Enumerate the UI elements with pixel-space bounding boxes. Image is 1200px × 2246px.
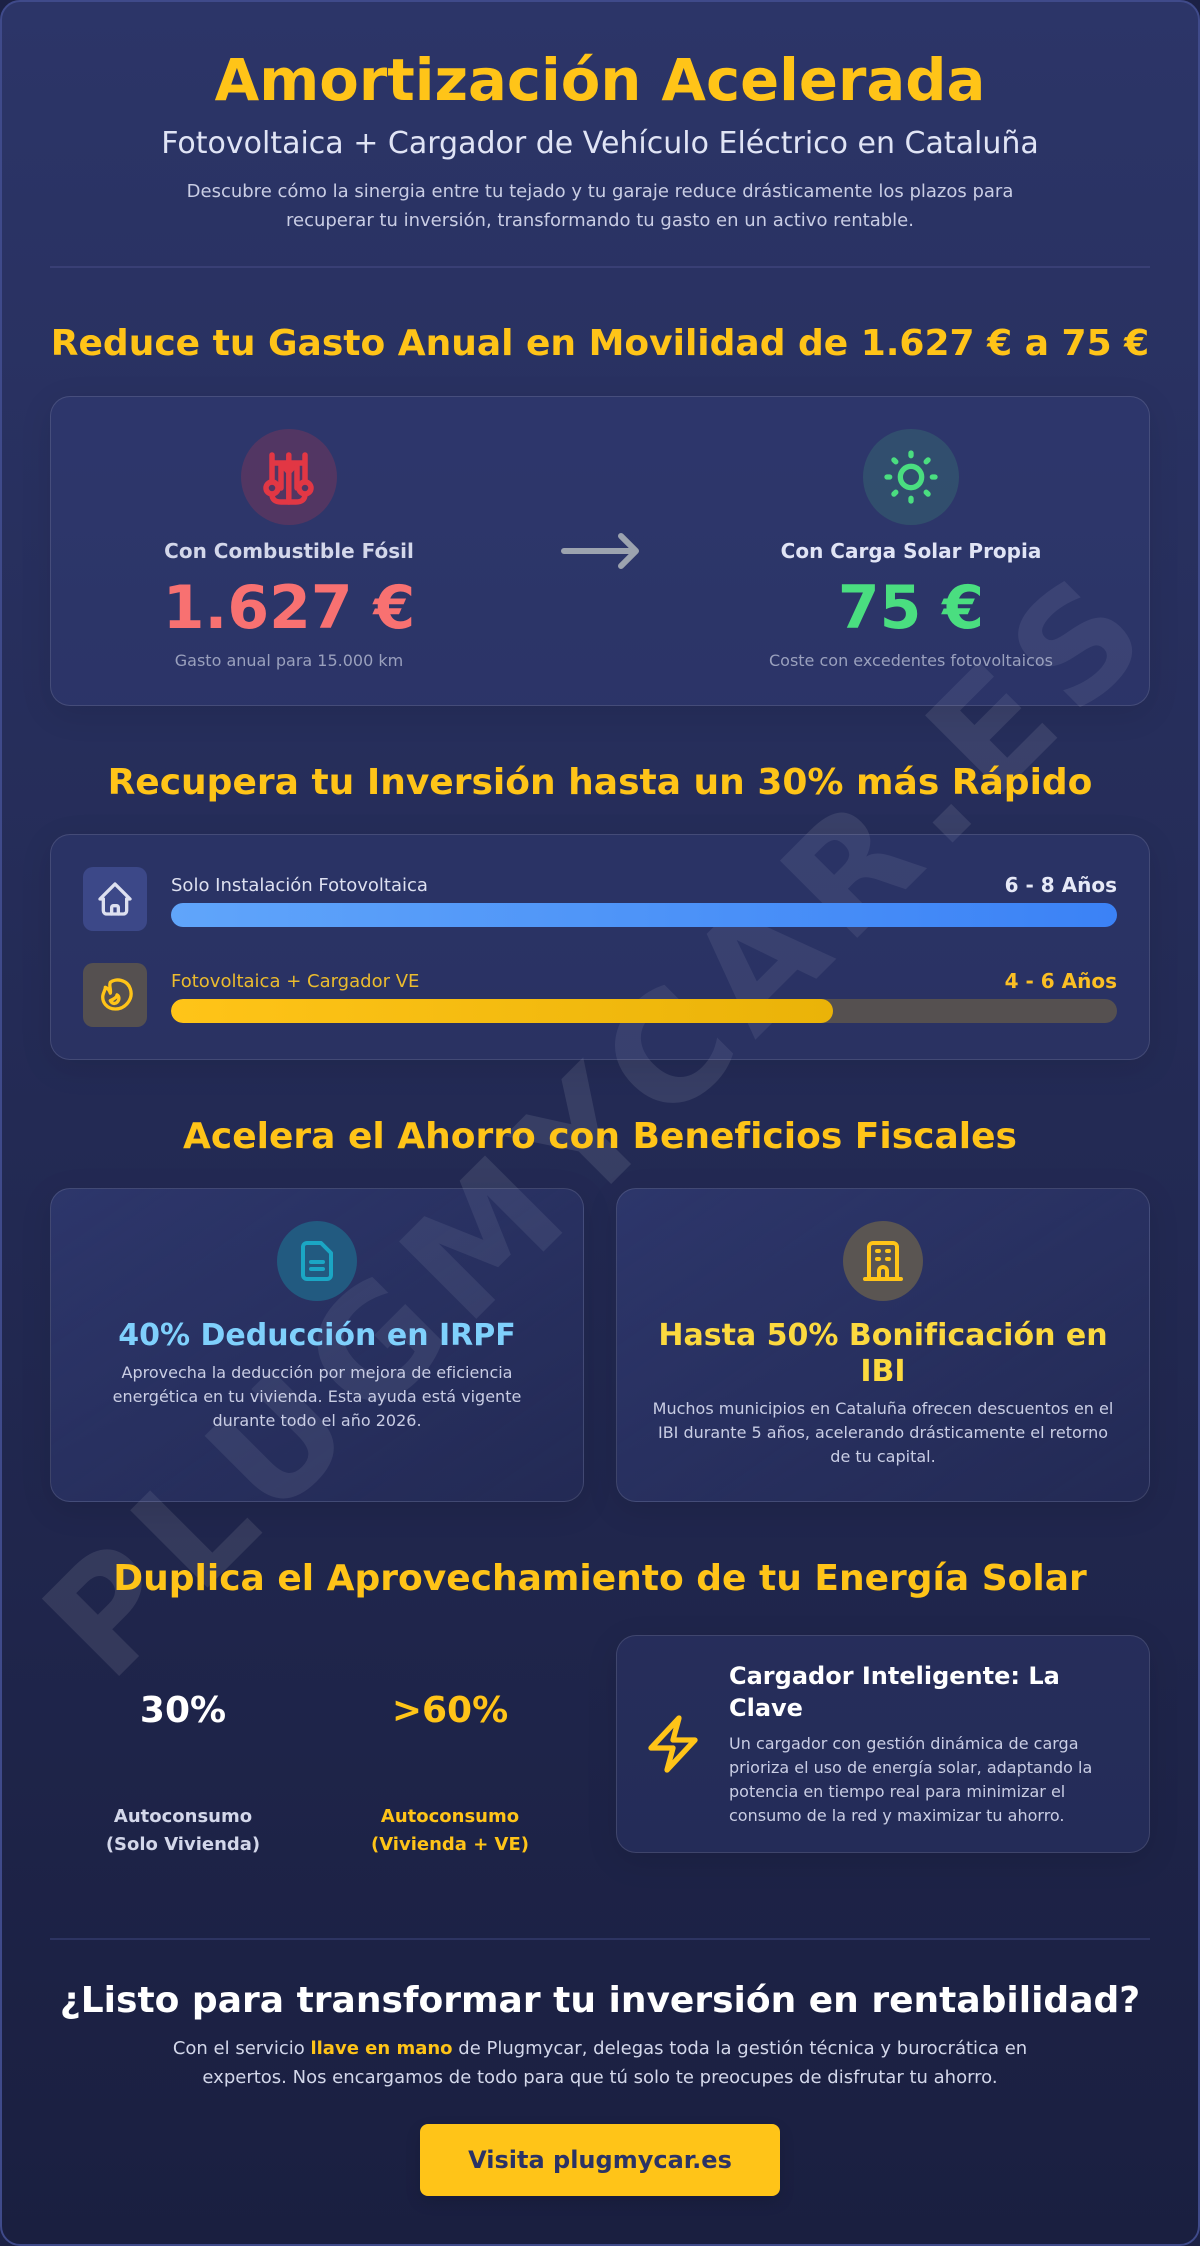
- intro text: recuperar tu inversión, transformando tu gasto en un activo rentable.: [286, 210, 914, 231]
- button: Visita plugmycar.es: [468, 2146, 732, 2174]
- smart charger title: Cargador Inteligente: La: [729, 1662, 1060, 1690]
- bar: PV + charger: [171, 999, 1117, 1023]
- stat: over 60%: >60%: [392, 1690, 508, 1730]
- IBI text: [653, 1398, 1113, 1466]
- panel: annual spend comparison: [50, 396, 1150, 706]
- note: solar: Coste con excedentes fotovoltaicos: [769, 650, 1053, 670]
- stat label: housing + EV: [371, 1806, 529, 1855]
- heading: call to action: ¿Listo para transformar tu inversión en rentabilidad?: [60, 1980, 1140, 2020]
- stat label: housing + EV: Autoconsumo: [381, 1806, 519, 1827]
- smart charger text: potencia en tiempo real para minimizar el: [729, 1782, 1065, 1800]
- stat label: housing only: [106, 1806, 260, 1855]
- heading: payback: Recupera tu Inversión hasta un 30% más Rápido: [108, 762, 1092, 802]
- smart charger title: Clave: [729, 1694, 803, 1722]
- stat label: housing + EV: (Vivienda + VE): [371, 1834, 529, 1855]
- smart charger text: Un cargador con gestión dinámica de carga: [729, 1734, 1078, 1752]
- label: fossil fuel: Con Combustible Fósil: [164, 539, 414, 563]
- IRPF text: Aprovecha la deducción por mejora de eficiencia: [122, 1362, 512, 1382]
- IBI text: de tu capital.: [830, 1446, 936, 1466]
- arrow: [561, 533, 639, 569]
- stat label: housing only: (Solo Vivienda): [106, 1834, 260, 1855]
- IBI title: IBI: [860, 1354, 906, 1389]
- smart charger title: [729, 1662, 1060, 1722]
- panel: IRPF card: [50, 1188, 584, 1502]
- subtitle: Fotovoltaica + Cargador de Vehículo Eléctrico en Cataluña: [161, 126, 1039, 161]
- heading: tax: Acelera el Ahorro con Beneficios Fiscales: [183, 1116, 1017, 1156]
- panel: IBI card: [616, 1188, 1150, 1502]
- panel: payback bars: [50, 834, 1150, 1060]
- icon: fuel: [241, 429, 337, 525]
- value: solar cost: 75 €: [838, 573, 984, 643]
- note: fossil fuel: Gasto anual para 15.000 km: [175, 650, 403, 670]
- smart charger text: [729, 1734, 1092, 1824]
- IRPF title: 40% Deducción en IRPF: [118, 1318, 516, 1353]
- icon: home: [83, 867, 147, 931]
- stat label: housing only: Autoconsumo: [114, 1806, 252, 1827]
- icon: flame charger: [83, 963, 147, 1027]
- button: [420, 2124, 780, 2196]
- IBI title: [658, 1318, 1108, 1389]
- IBI text: IBI durante 5 años, acelerando drásticamente el retorno: [658, 1422, 1108, 1442]
- value: fossil fuel cost: 1.627 €: [163, 573, 415, 643]
- heading: self-consumption: Duplica el Aprovechamiento de tu Energía Solar: [113, 1558, 1087, 1598]
- panel: smart charger: [616, 1635, 1150, 1853]
- label: solar charge: Con Carga Solar Propia: [781, 539, 1041, 563]
- value: PV + charger years: 4 - 6 Años: [1005, 969, 1117, 993]
- intro text: [187, 181, 1013, 231]
- intro text: Descubre cómo la sinergia entre tu tejado y tu garaje reduce drásticamente los plazos para: [187, 181, 1013, 202]
- icon: bolt: [648, 1715, 698, 1773]
- icon: building: [843, 1221, 923, 1301]
- title: Amortización Acelerada: [215, 47, 985, 114]
- label: PV only: Solo Instalación Fotovoltaica: [171, 875, 428, 896]
- icon: sun: [863, 429, 959, 525]
- call to action text: Con el servicio llave en mano de Plugmycar, delegas toda la gestión técnica y burocrática en: [173, 2038, 1027, 2059]
- smart charger text: consumo de la red y maximizar tu ahorro.: [729, 1806, 1065, 1824]
- smart charger text: prioriza el uso de energía solar, adaptando la: [729, 1758, 1092, 1776]
- bar: PV only: [171, 903, 1117, 927]
- IRPF text: [113, 1362, 521, 1430]
- stat: 30%: 30%: [140, 1690, 226, 1730]
- watermark: PLUGMYCAR.ES: [12, 535, 1188, 1711]
- label: PV + charger: Fotovoltaica + Cargador VE: [171, 971, 419, 992]
- IBI title: Hasta 50% Bonificación en: [658, 1318, 1108, 1353]
- icon: document: [277, 1221, 357, 1301]
- IRPF text: energética en tu vivienda. Esta ayuda está vigente: [113, 1386, 521, 1406]
- IRPF text: durante todo el año 2026.: [212, 1410, 422, 1430]
- call to action text: expertos. Nos encargamos de todo para que tú solo te preocupes de disfrutar tu ahorro.: [202, 2067, 998, 2088]
- call to action text: [173, 2038, 1027, 2088]
- IBI text: Muchos municipios en Cataluña ofrecen descuentos en el: [653, 1398, 1113, 1418]
- value: PV only years: 6 - 8 Años: [1005, 873, 1117, 897]
- heading: annual spend: Reduce tu Gasto Anual en Movilidad de 1.627 € a 75 €: [51, 323, 1149, 364]
